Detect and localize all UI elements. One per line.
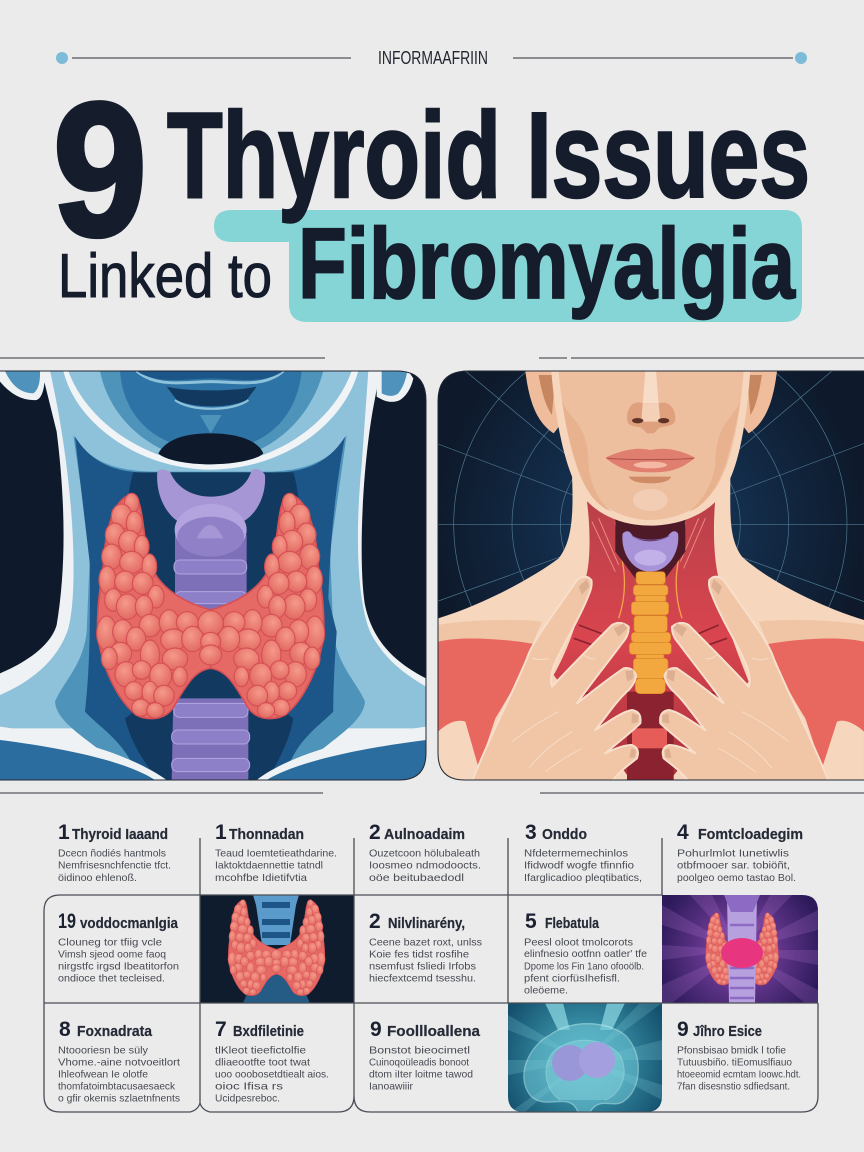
item: row 3 col 1: Vhome.-aine notvoeitlort [58, 1058, 180, 1068]
item: row 1 col 4 [524, 821, 642, 884]
item: row 1 col 5: 4 [677, 821, 689, 844]
item: row 1 col 3: 2 [369, 821, 381, 844]
item: row 3 col 2: oioc Ifisa rs [215, 1082, 283, 1092]
item: row 2 col 1: voddocmanlgia [80, 915, 179, 932]
item: row 2 col 1: Clouneg tor tfiig vcle [58, 938, 162, 948]
item: row 3 col 2: 7 [215, 1018, 227, 1041]
item: row 3 col 1: Ntoooriesn be süly [58, 1046, 149, 1056]
item: row 3 col 5: 7fan disesnstio sdfiedsant. [677, 1082, 790, 1092]
item: row 1 col 3: Ouzetcoon hölubaleath [369, 848, 480, 860]
panel: thyroid anatomy illustration [0, 365, 433, 785]
item: row 1 col 3 [369, 821, 481, 884]
item: row 3 col 2: Bxdfiletinie [233, 1023, 304, 1040]
item: row 3 col 3: Foollloallena [387, 1023, 481, 1040]
title: 9 [53, 64, 147, 276]
grid lines [44, 838, 818, 1112]
item: row 2 col 4: oleöeme. [524, 986, 568, 996]
top rule with label: INFORMAAFRIIN [378, 48, 488, 68]
title: Linked to [58, 242, 272, 311]
thumbnail: thyroid on purple rays [662, 895, 818, 1003]
item: row 2 col 3 [369, 910, 482, 984]
item: row 1 col 2: Thonnadan [229, 826, 304, 843]
item: row 3 col 3: dtom iIter loitme tawod [369, 1070, 473, 1080]
panel: person holding neck illustration [438, 370, 864, 780]
item: row 2 col 4: elinfnesio ootfnn oatler' tfe [524, 949, 647, 960]
item: row 3 col 3: Bonstot bieocimetl [369, 1046, 470, 1056]
item: row 3 col 3 [369, 1018, 481, 1092]
item: row 2 col 3: 2 [369, 910, 381, 933]
item: row 3 col 1: Foxnadrata [77, 1023, 153, 1040]
item: row 1 col 1: Dcecn ñodiés hantmols [58, 848, 166, 860]
item: row 1 col 1 [58, 821, 171, 884]
item: row 3 col 5: 9 [677, 1018, 689, 1041]
item: row 2 col 1: 19 [58, 910, 76, 933]
item: row 2 col 3: Koie fes tidst rosfihe [369, 950, 469, 960]
item: row 1 col 5: Pohurlmlot Iunetiwlis [677, 848, 789, 860]
item: row 1 col 3: Ioosmeo ndmodoocts. [369, 860, 481, 872]
item: row 2 col 4: Dpome los Fin 1ano ofooölb. [524, 962, 644, 972]
item: row 1 col 2: Iaktoktdaennettie tatndl [215, 860, 323, 872]
item: row 2 col 1 [58, 910, 179, 984]
top rule with label [56, 48, 807, 68]
item: row 1 col 1: öidinoo ehlenoß. [58, 873, 137, 884]
item: row 1 col 5: poolgeo oemo tastao Bol. [677, 873, 796, 884]
title [53, 64, 810, 322]
item: row 1 col 1: Nemfrisesnchfenctie tfct. [58, 860, 171, 872]
item: row 1 col 2: mcohfbe Idietifvtia [215, 873, 307, 884]
item: row 1 col 3: Aulnoadaim [384, 826, 465, 843]
item: row 2 col 1: ondioce thet tecleised. [58, 974, 165, 984]
item: row 3 col 5: Pfonsbisao bmidk l tofie [677, 1046, 786, 1056]
item: row 3 col 5: Tutuusbiño. tiEomuslfiauo [677, 1058, 792, 1068]
item: row 1 col 3: oöe beitubaedodl [369, 873, 464, 884]
item: row 2 col 3: Nilvlinarény, [388, 915, 465, 932]
item: row 3 col 5: htoeeomid ecmtam Ioowc.hdt. [677, 1070, 801, 1080]
item: row 2 col 3: nsemfust fsliedi Irfobs [369, 962, 476, 972]
item: row 3 col 5 [677, 1018, 801, 1092]
item: row 2 col 4: pfent ciorfüsIhefisfl. [524, 974, 620, 984]
item: row 3 col 5: Jîhro Esice [693, 1023, 762, 1040]
item: row 2 col 4 [524, 910, 647, 996]
item: row 1 col 4: Onddo [542, 826, 587, 843]
item: row 3 col 2: dliaeootfte toot twat [215, 1058, 310, 1068]
item: row 3 col 1 [58, 1018, 180, 1104]
item: row 3 col 3: Cuinoqoüleadis bonoot [369, 1058, 469, 1068]
item: row 1 col 4: Ifarglicadioo pleqtibatics, [524, 873, 642, 884]
item: row 2 col 3: Ceene bazet roxt, unlss [369, 938, 482, 948]
item: row 1 col 1: Thyroid Iaaand [72, 826, 168, 843]
item: row 3 col 1: o gfir okemis szlaetnfnents [58, 1094, 180, 1104]
item: row 1 col 2 [215, 821, 337, 884]
item: row 2 col 1: Vimsh sjeod oome faoq [58, 950, 166, 960]
item: row 2 col 4: 5 [525, 910, 537, 933]
item: row 2 col 4: Peesl oloot tmolcorots [524, 938, 633, 948]
item: row 3 col 2: tlKleot tieefictolfie [215, 1046, 306, 1056]
section rules [0, 358, 864, 793]
item: row 1 col 5: otbfmooer sar. tobiöñt, [677, 860, 790, 872]
item: row 3 col 1: Ihleofwean Ie olotfe [58, 1070, 148, 1080]
item: row 3 col 3: 9 [370, 1018, 382, 1041]
item: row 1 col 5 [677, 821, 803, 884]
item: row 2 col 4: Flebatula [545, 915, 600, 932]
item: row 1 col 1: 1 [58, 821, 70, 844]
item: row 1 col 4: Nfdetermemechinlos [524, 848, 628, 860]
item: row 1 col 2: 1 [215, 821, 227, 844]
item: row 2 col 3: hiecfextcemd tsesshu. [369, 974, 476, 984]
item: row 1 col 4: 3 [525, 821, 537, 844]
item: row 3 col 1: thomfatoimbtacusaesaeck [58, 1082, 176, 1092]
item: row 3 col 1: 8 [59, 1018, 71, 1041]
item: row 1 col 4: Ifidwodf wogfe tfinnfio [524, 860, 634, 872]
item: row 3 col 3: Ianoawiiir [369, 1082, 414, 1092]
item: row 1 col 5: Fomtcloadegim [698, 826, 803, 843]
item: row 3 col 2: Ucidpesreboc. [215, 1094, 280, 1104]
item: row 1 col 2: Teaud Ioemtetieathdarine. [215, 848, 337, 860]
thumbnail: teal gland [508, 1003, 662, 1112]
item: row 2 col 1: nirgstfc irgsd Ibeatitorfon [58, 962, 179, 972]
item: row 3 col 2: uoo ooobosetdtiealt aios. [215, 1070, 329, 1080]
thumbnail: thyroid on dark background [200, 895, 354, 1003]
item: row 3 col 2 [215, 1018, 329, 1104]
